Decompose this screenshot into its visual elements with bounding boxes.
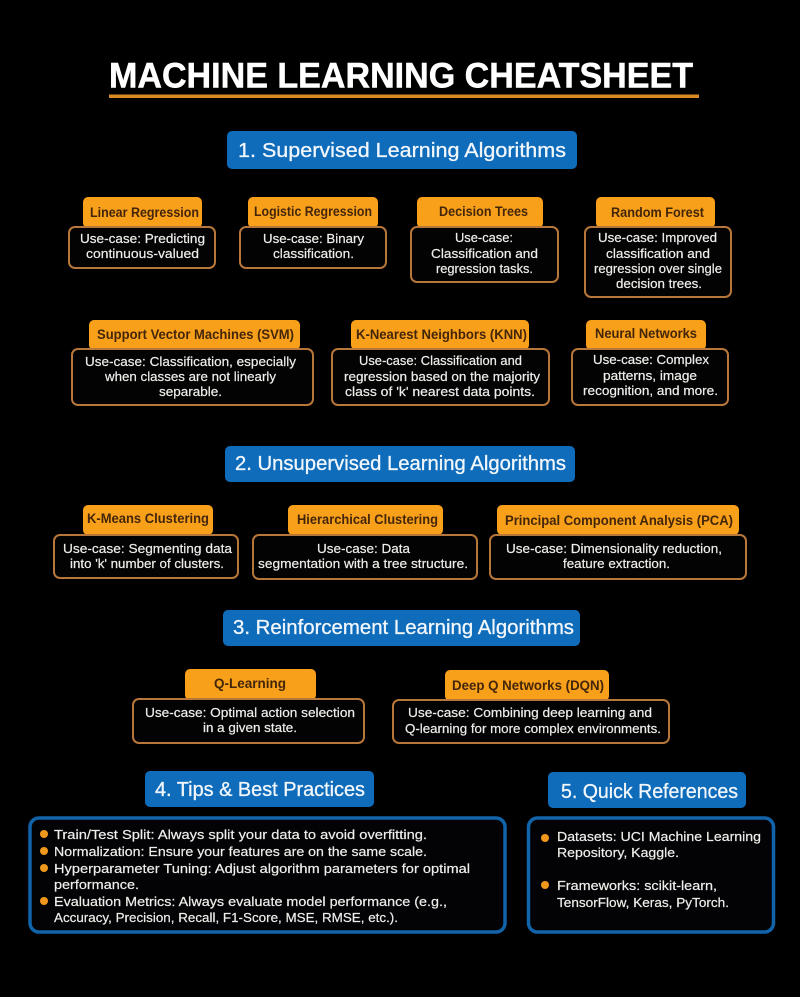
- card: k-means clustering: [54, 505, 238, 578]
- panel: tips list: performance.: [54, 877, 139, 892]
- title: MACHINE LEARNING CHEATSHEET: [109, 56, 693, 96]
- use-case: neural networks: [572, 349, 728, 405]
- use-case: hierarchical: Use-case: Data: [317, 541, 411, 556]
- use-case: decision trees: Use-case:: [455, 230, 513, 245]
- use-case: logistic regression: Use-case: Binary: [263, 231, 365, 246]
- label: random forest: [596, 197, 715, 228]
- section heading: unsupervised learning: 2. Unsupervised Learning Algorithms: [235, 452, 566, 475]
- label: knn: K-Nearest Neighbors (KNN): [356, 327, 527, 342]
- card: deep q networks: [393, 670, 669, 743]
- label: random forest: Random Forest: [611, 205, 704, 220]
- section heading: supervised learning: [227, 131, 577, 169]
- panel: tips list: Accuracy, Precision, Recall, F1-Score, MSE, RMSE, etc.).: [54, 910, 398, 925]
- label: k-means: K-Means Clustering: [87, 511, 209, 526]
- card: logistic regression: [240, 197, 386, 268]
- section heading: quick references: [548, 772, 746, 808]
- use-case: svm: Use-case: Classification, especially: [85, 354, 297, 369]
- card: decision trees: [411, 197, 558, 282]
- section heading: quick references: 5. Quick References: [561, 780, 738, 803]
- use-case: neural networks: recognition, and more.: [583, 383, 718, 398]
- use-case: dqn: [393, 700, 669, 743]
- section heading: reinforcement learning: [223, 610, 580, 646]
- label: neural networks: [586, 320, 706, 350]
- use-case: k-means: [54, 535, 238, 578]
- panel: quick references list: TensorFlow, Keras, PyTorch.: [557, 895, 729, 910]
- card: hierarchical clustering: [253, 505, 477, 579]
- card: random forest: [585, 197, 731, 297]
- section heading: tips and best practices: [145, 771, 374, 807]
- label: linear regression: Linear Regression: [90, 205, 199, 220]
- panel: tips list: Hyperparameter Tuning: Adjust algorithm parameters for optimal: [54, 861, 470, 876]
- label: knn: [351, 320, 529, 350]
- panel: quick references list: Repository, Kaggle.: [557, 845, 679, 860]
- label: hierarchical: [288, 505, 443, 535]
- use-case: knn: regression based on the majority: [344, 369, 541, 384]
- label: pca: Principal Component Analysis (PCA): [505, 513, 733, 528]
- use-case: dqn: Use-case: Combining deep learning and: [408, 705, 652, 720]
- label: hierarchical: Hierarchical Clustering: [297, 512, 438, 527]
- card: neural networks: [572, 320, 728, 405]
- card: q-learning: [133, 669, 364, 743]
- label: svm: Support Vector Machines (SVM): [97, 327, 294, 342]
- label: pca: [497, 505, 739, 535]
- use-case: neural networks: Use-case: Complex: [593, 352, 709, 367]
- label: linear regression: [83, 197, 202, 228]
- label: dqn: Deep Q Networks (DQN): [452, 678, 604, 693]
- panel: quick references list: [528, 818, 774, 932]
- use-case: knn: class of 'k' nearest data points.: [345, 384, 535, 399]
- use-case: dqn: Q-learning for more complex environments.: [405, 721, 661, 736]
- panel: tips list: Train/Test Split: Always split your data to avoid overfitting.: [54, 827, 427, 842]
- use-case: decision trees: [411, 227, 558, 282]
- card: support vector machines: [72, 320, 313, 405]
- section heading: supervised learning: 1. Supervised Learning Algorithms: [238, 139, 566, 162]
- panel: quick references list: Frameworks: scikit-learn,: [557, 878, 717, 893]
- use-case: k-means: Use-case: Segmenting data: [63, 541, 233, 556]
- use-case: logistic regression: classification.: [273, 246, 354, 261]
- use-case: knn: [332, 349, 549, 405]
- use-case: random forest: classification and: [606, 246, 710, 261]
- panel: quick references list: Datasets: UCI Machine Learning: [557, 829, 761, 844]
- use-case: hierarchical: [253, 535, 477, 579]
- use-case: random forest: [585, 227, 731, 297]
- panel: tips list: Evaluation Metrics: Always evaluate model performance (e.g.,: [54, 894, 447, 909]
- use-case: logistic regression: [240, 227, 386, 268]
- label: logistic regression: Logistic Regression: [254, 204, 372, 219]
- use-case: q-learning: in a given state.: [203, 720, 297, 735]
- use-case: linear regression: continuous-valued: [86, 246, 199, 261]
- label: svm: [89, 320, 300, 350]
- use-case: k-means: into 'k' number of clusters.: [70, 556, 224, 571]
- use-case: hierarchical: segmentation with a tree structure.: [258, 556, 468, 571]
- use-case: linear regression: [69, 227, 215, 268]
- use-case: linear regression: Use-case: Predicting: [80, 231, 205, 246]
- section heading: unsupervised learning: [225, 446, 575, 482]
- use-case: random forest: decision trees.: [616, 276, 702, 291]
- use-case: pca: feature extraction.: [563, 556, 670, 571]
- label: dqn: [445, 670, 609, 701]
- section heading: reinforcement learning: 3. Reinforcement Learning Algorithms: [233, 616, 574, 639]
- use-case: knn: Use-case: Classification and: [359, 353, 522, 368]
- use-case: q-learning: [133, 699, 364, 743]
- label: decision trees: Decision Trees: [439, 204, 528, 219]
- use-case: svm: separable.: [159, 384, 222, 399]
- label: k-means: [83, 505, 213, 535]
- use-case: neural networks: patterns, image: [603, 368, 697, 383]
- use-case: pca: [490, 535, 746, 579]
- use-case: q-learning: Use-case: Optimal action selection: [145, 705, 355, 720]
- use-case: decision trees: Classification and: [431, 246, 538, 261]
- panel: tips list: [30, 818, 505, 932]
- use-case: pca: Use-case: Dimensionality reduction,: [506, 541, 722, 556]
- use-case: svm: when classes are not linearly: [104, 369, 277, 384]
- use-case: random forest: regression over single: [594, 261, 722, 276]
- card: linear regression: [69, 197, 215, 268]
- label: neural networks: Neural Networks: [595, 326, 697, 341]
- card: principal component analysis: [490, 505, 746, 579]
- label: decision trees: [417, 197, 543, 228]
- panel: tips list: Normalization: Ensure your features are on the same scale.: [54, 844, 427, 859]
- label: q-learning: Q-Learning: [214, 676, 286, 691]
- use-case: svm: [72, 349, 313, 405]
- section heading: tips and best practices: 4. Tips & Best Practices: [155, 778, 365, 801]
- label: logistic regression: [248, 197, 378, 228]
- label: q-learning: [185, 669, 316, 700]
- use-case: decision trees: regression tasks.: [436, 261, 533, 276]
- use-case: random forest: Use-case: Improved: [598, 230, 717, 245]
- card: k-nearest neighbors: [332, 320, 549, 405]
